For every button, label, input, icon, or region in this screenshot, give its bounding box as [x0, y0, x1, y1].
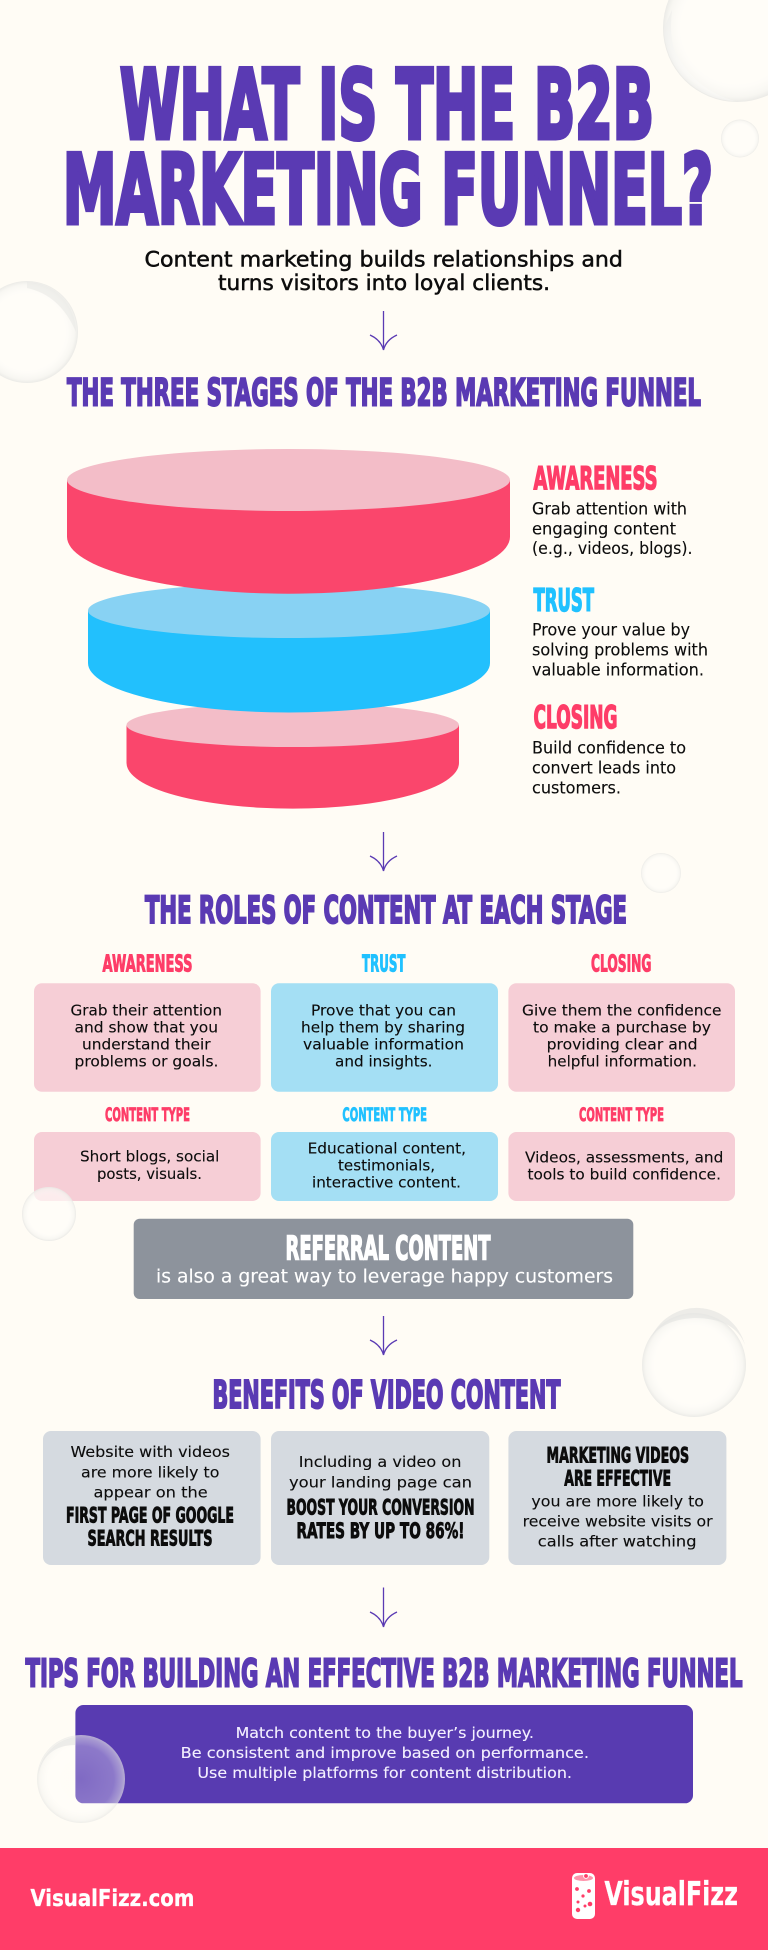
card: marketing videos: receive website visits or [523, 1512, 713, 1530]
stage: closing [532, 700, 686, 797]
stage: trust: solving problems with [532, 640, 708, 659]
stage: awareness: engaging content [532, 519, 677, 538]
stage: closing: convert leads into [532, 758, 676, 777]
label: content type closing: CONTENT TYPE [579, 1104, 664, 1126]
subtitle: turns visitors into loyal clients. [218, 271, 550, 295]
card: search results: appear on the [94, 1484, 208, 1502]
card: closing content type: tools to build confidence. [528, 1166, 721, 1184]
funnel: trust disk [88, 583, 490, 712]
card: awareness role: understand their [82, 1036, 211, 1054]
stage: awareness: AWARENESS [534, 461, 658, 497]
subtitle [144, 248, 623, 295]
label: content type trust: CONTENT TYPE [342, 1104, 427, 1126]
panel: tips: Match content to the buyer’s journey. [236, 1724, 534, 1742]
panel: tips: Use multiple platforms for content distribution. [197, 1764, 572, 1782]
logo [572, 1873, 738, 1919]
subtitle: Content marketing builds relationships and [144, 248, 623, 272]
stage: trust: TRUST [534, 583, 594, 619]
arrow [370, 832, 397, 871]
card: trust content type [271, 1132, 498, 1201]
card: trust role: Prove that you can [311, 1002, 456, 1020]
card: awareness role: problems or goals. [74, 1053, 218, 1071]
card: conversion rates: RATES BY UP TO 86%! [296, 1519, 464, 1543]
card: closing role [508, 983, 735, 1092]
stage: closing: CLOSING [534, 700, 618, 736]
arrow [370, 1588, 397, 1627]
panel: tips [75, 1705, 693, 1803]
card: marketing videos: you are more likely to [531, 1492, 704, 1510]
stage: closing: customers. [532, 778, 621, 797]
card: trust role: and insights. [335, 1053, 432, 1071]
callout: referral content: is also a great way to leverage happy customers [156, 1266, 613, 1288]
arrow [370, 1316, 397, 1355]
card: awareness role: and show that you [74, 1019, 218, 1037]
card: marketing videos: calls after watching [538, 1533, 696, 1551]
card: closing role: to make a purchase by [533, 1019, 711, 1037]
icon: soda can [572, 1873, 595, 1919]
card: marketing videos [508, 1431, 726, 1565]
card: closing content type [508, 1132, 735, 1201]
stage: awareness: Grab attention with [532, 499, 687, 518]
stage: trust: Prove your value by [532, 620, 690, 639]
bubble: top right small [721, 120, 759, 158]
card: closing role: helpful information. [548, 1053, 697, 1071]
card: search results: are more likely to [81, 1463, 219, 1481]
label: content type awareness: CONTENT TYPE [105, 1104, 190, 1126]
stage: trust [532, 583, 708, 679]
card: search results: SEARCH RESULTS [88, 1526, 212, 1550]
card: conversion rates [271, 1431, 489, 1565]
card: awareness content type: posts, visuals. [97, 1165, 202, 1183]
card: awareness role: Grab their attention [70, 1002, 222, 1020]
callout: referral content [134, 1219, 633, 1299]
footer band [0, 1848, 768, 1950]
funnel: awareness disk [67, 449, 510, 594]
card: trust content type: Educational content, [308, 1140, 466, 1158]
card: trust content type: testimonials, [338, 1157, 435, 1175]
label: awareness: AWARENESS [102, 952, 192, 978]
bubble: over tips panel [37, 1735, 125, 1823]
card: trust content type: interactive content. [312, 1174, 461, 1192]
label: trust: TRUST [362, 952, 406, 978]
funnel: closing disk [126, 703, 459, 809]
card: closing content type: Videos, assessments, and [525, 1149, 723, 1167]
card: trust role: help them by sharing [301, 1019, 465, 1037]
bubble: over card [22, 1187, 76, 1241]
arrow [370, 311, 397, 350]
funnel diagram [67, 449, 510, 809]
card: trust role: valuable information [303, 1036, 464, 1054]
card: trust role [271, 983, 498, 1092]
card: search results: Website with videos [70, 1443, 230, 1461]
card: awareness content type [34, 1132, 261, 1201]
bubble: top right large [663, 0, 768, 102]
panel: tips: Be consistent and improve based on performance. [181, 1744, 589, 1762]
card: awareness content type: Short blogs, social [80, 1148, 219, 1166]
card: marketing videos: ARE EFFECTIVE [564, 1466, 671, 1490]
bubble: left [0, 281, 78, 383]
stage: awareness: (e.g., videos, blogs). [532, 539, 692, 558]
label: closing: CLOSING [591, 952, 652, 978]
card: conversion rates: BOOST YOUR CONVERSION [286, 1496, 474, 1520]
title [63, 51, 713, 246]
card: awareness role [34, 983, 261, 1092]
stage: awareness [532, 461, 692, 558]
bubble: mid right [641, 853, 681, 893]
callout: referral content: REFERRAL CONTENT [286, 1228, 491, 1268]
card: conversion rates: Including a video on [299, 1453, 461, 1471]
card: closing role: Give them the confidence [522, 1002, 722, 1020]
footer url: VisualFizz.com [30, 1884, 194, 1912]
stage: trust: valuable information. [532, 660, 704, 679]
stage: closing: Build confidence to [532, 738, 686, 757]
card: closing role: providing clear and [547, 1036, 698, 1054]
bubble: lower right [642, 1308, 746, 1417]
card: search results [43, 1431, 261, 1565]
card: search results: FIRST PAGE OF GOOGLE [66, 1504, 234, 1528]
card: conversion rates: your landing page can [289, 1473, 472, 1491]
